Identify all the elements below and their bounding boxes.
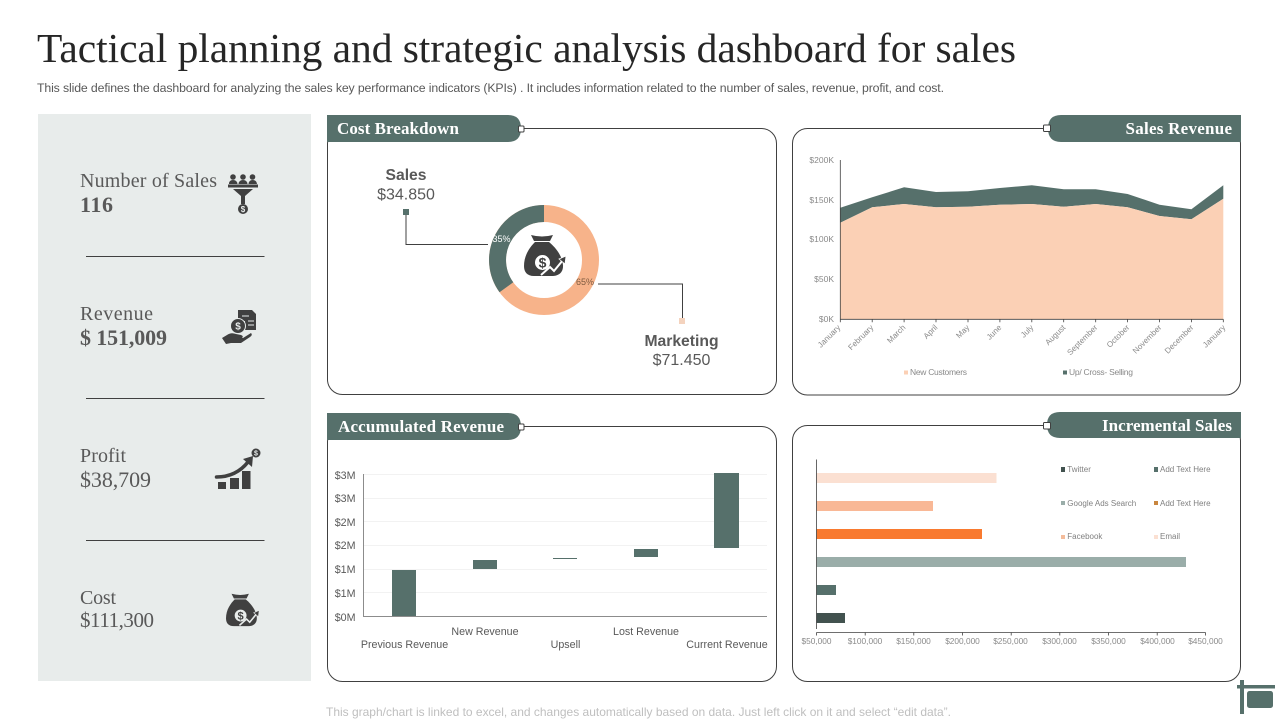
area chart: February — [846, 323, 875, 352]
legend: sales revenue — [904, 367, 1133, 377]
heading: accumulated revenue: Accumulated Revenue — [338, 417, 504, 436]
area chart: December — [1163, 323, 1196, 356]
bar chart: $450,000 — [1188, 636, 1223, 646]
heading: sales revenue — [1044, 115, 1241, 142]
waterfall chart: Lost Revenue — [613, 626, 679, 638]
heading: incremental sales — [1044, 412, 1241, 438]
donut chart: 65% — [576, 277, 594, 287]
bar chart: $250,000 — [993, 636, 1028, 646]
panel: accumulated revenue — [327, 413, 776, 682]
legend: incremental sales: Add Text Here — [1160, 465, 1211, 474]
KPI: cost: $111,300 — [80, 608, 154, 632]
callout: sales — [377, 167, 488, 244]
waterfall chart: $1M — [335, 588, 356, 600]
bar chart: $50,000 — [802, 636, 832, 646]
area chart: June — [985, 323, 1004, 342]
title: Tactical planning and strategic analysis dashboard for sales — [37, 25, 1016, 71]
callout: sales: $34.850 — [377, 186, 435, 204]
callout: marketing — [598, 284, 719, 369]
footnote: This graph/chart is linked to excel, and changes automatically based on data. Just left click on it and select “edit data”. — [326, 705, 951, 719]
panel: sales revenue — [792, 115, 1241, 395]
KPI: revenue — [80, 303, 167, 350]
waterfall chart: Current Revenue — [686, 639, 768, 651]
KPI: cost — [80, 587, 154, 632]
bar chart: $150,000 — [896, 636, 931, 646]
area chart: September — [1065, 323, 1100, 357]
icon: growth chart — [216, 448, 260, 489]
waterfall chart: $3M — [335, 493, 356, 505]
area chart: July — [1019, 323, 1035, 339]
area chart: March — [885, 323, 907, 345]
legend: incremental sales: Facebook — [1067, 532, 1103, 541]
KPI: profit: Profit — [80, 445, 126, 467]
waterfall chart: Upsell — [551, 639, 580, 651]
bar chart: $350,000 — [1091, 636, 1126, 646]
icon: money bag: $ — [539, 254, 547, 270]
callout: marketing: Marketing — [644, 333, 719, 350]
waterfall chart: $1M — [335, 564, 356, 576]
legend: incremental sales: Email — [1160, 532, 1180, 541]
legend: incremental sales: Google Ads Search — [1067, 499, 1136, 508]
icon: sales funnel: $ — [241, 205, 246, 214]
subtitle: This slide defines the dashboard for analyzing the sales key performance indicators (KPIs) . It includes information related to the number of sales, revenue, profit, and cost. — [37, 81, 944, 95]
area chart: January — [816, 323, 842, 350]
icon: corner sign logo — [1237, 680, 1275, 714]
icon: growth chart: $ — [254, 450, 258, 458]
bar chart — [802, 460, 1223, 646]
area chart: $0K — [819, 314, 834, 324]
waterfall chart: Previous Revenue — [361, 639, 448, 651]
donut chart — [492, 214, 594, 306]
area chart: $200K — [809, 155, 834, 165]
waterfall chart — [335, 470, 768, 651]
heading: cost breakdown: Cost Breakdown — [337, 119, 460, 138]
callout: sales: Sales — [386, 167, 427, 184]
panel: KPI sidebar — [38, 114, 311, 681]
KPI: cost: Cost — [80, 587, 116, 609]
bar chart: $300,000 — [1042, 636, 1077, 646]
KPI: revenue: $ 151,009 — [80, 325, 167, 350]
legend: sales revenue: Up/ Cross- Selling — [1069, 367, 1133, 377]
bar chart: $100,000 — [848, 636, 883, 646]
waterfall chart: $2M — [335, 517, 356, 529]
panel: cost breakdown — [327, 115, 776, 394]
area chart: October — [1105, 323, 1132, 350]
area chart — [809, 155, 1227, 377]
KPI: number of sales — [80, 170, 217, 217]
KPI: number of sales: Number of Sales — [80, 170, 217, 192]
KPI: revenue: Revenue — [80, 303, 153, 325]
bar chart: $200,000 — [945, 636, 980, 646]
KPI: number of sales: 116 — [80, 192, 113, 217]
area chart: May — [954, 323, 971, 340]
area chart: April — [922, 323, 940, 341]
icon: money bag — [524, 235, 566, 276]
legend: incremental sales — [1061, 465, 1211, 541]
legend: incremental sales: Twitter — [1067, 465, 1091, 474]
area chart: $50K — [814, 274, 834, 284]
area chart: $150K — [809, 195, 834, 205]
donut chart: 35% — [492, 234, 511, 244]
icon: sales funnel — [228, 174, 258, 214]
bar chart: $400,000 — [1140, 636, 1175, 646]
area chart: August — [1043, 323, 1068, 347]
icon: hand holding document and coin: $ — [235, 322, 241, 332]
heading: incremental sales: Incremental Sales — [1102, 416, 1232, 435]
KPI: profit: $38,709 — [80, 467, 151, 492]
icon: hand holding document and coin — [222, 310, 256, 344]
icon: money bag small: $ — [238, 610, 244, 622]
waterfall chart: New Revenue — [451, 626, 519, 638]
KPI: profit — [80, 445, 151, 492]
area chart: $100K — [809, 234, 834, 244]
legend: incremental sales: Add Text Here — [1160, 499, 1211, 508]
panel: incremental sales — [792, 412, 1241, 682]
waterfall chart: $3M — [335, 470, 356, 482]
area chart: November — [1131, 323, 1164, 356]
callout: marketing: $71.450 — [653, 352, 711, 369]
heading: cost breakdown — [327, 115, 524, 142]
heading: sales revenue: Sales Revenue — [1126, 119, 1232, 138]
icon: money bag small — [226, 594, 259, 626]
waterfall chart: $2M — [335, 540, 356, 552]
area chart: January — [1201, 323, 1227, 350]
waterfall chart: $0M — [335, 612, 356, 624]
legend: sales revenue: New Customers — [910, 367, 967, 377]
heading: accumulated revenue — [327, 413, 524, 440]
